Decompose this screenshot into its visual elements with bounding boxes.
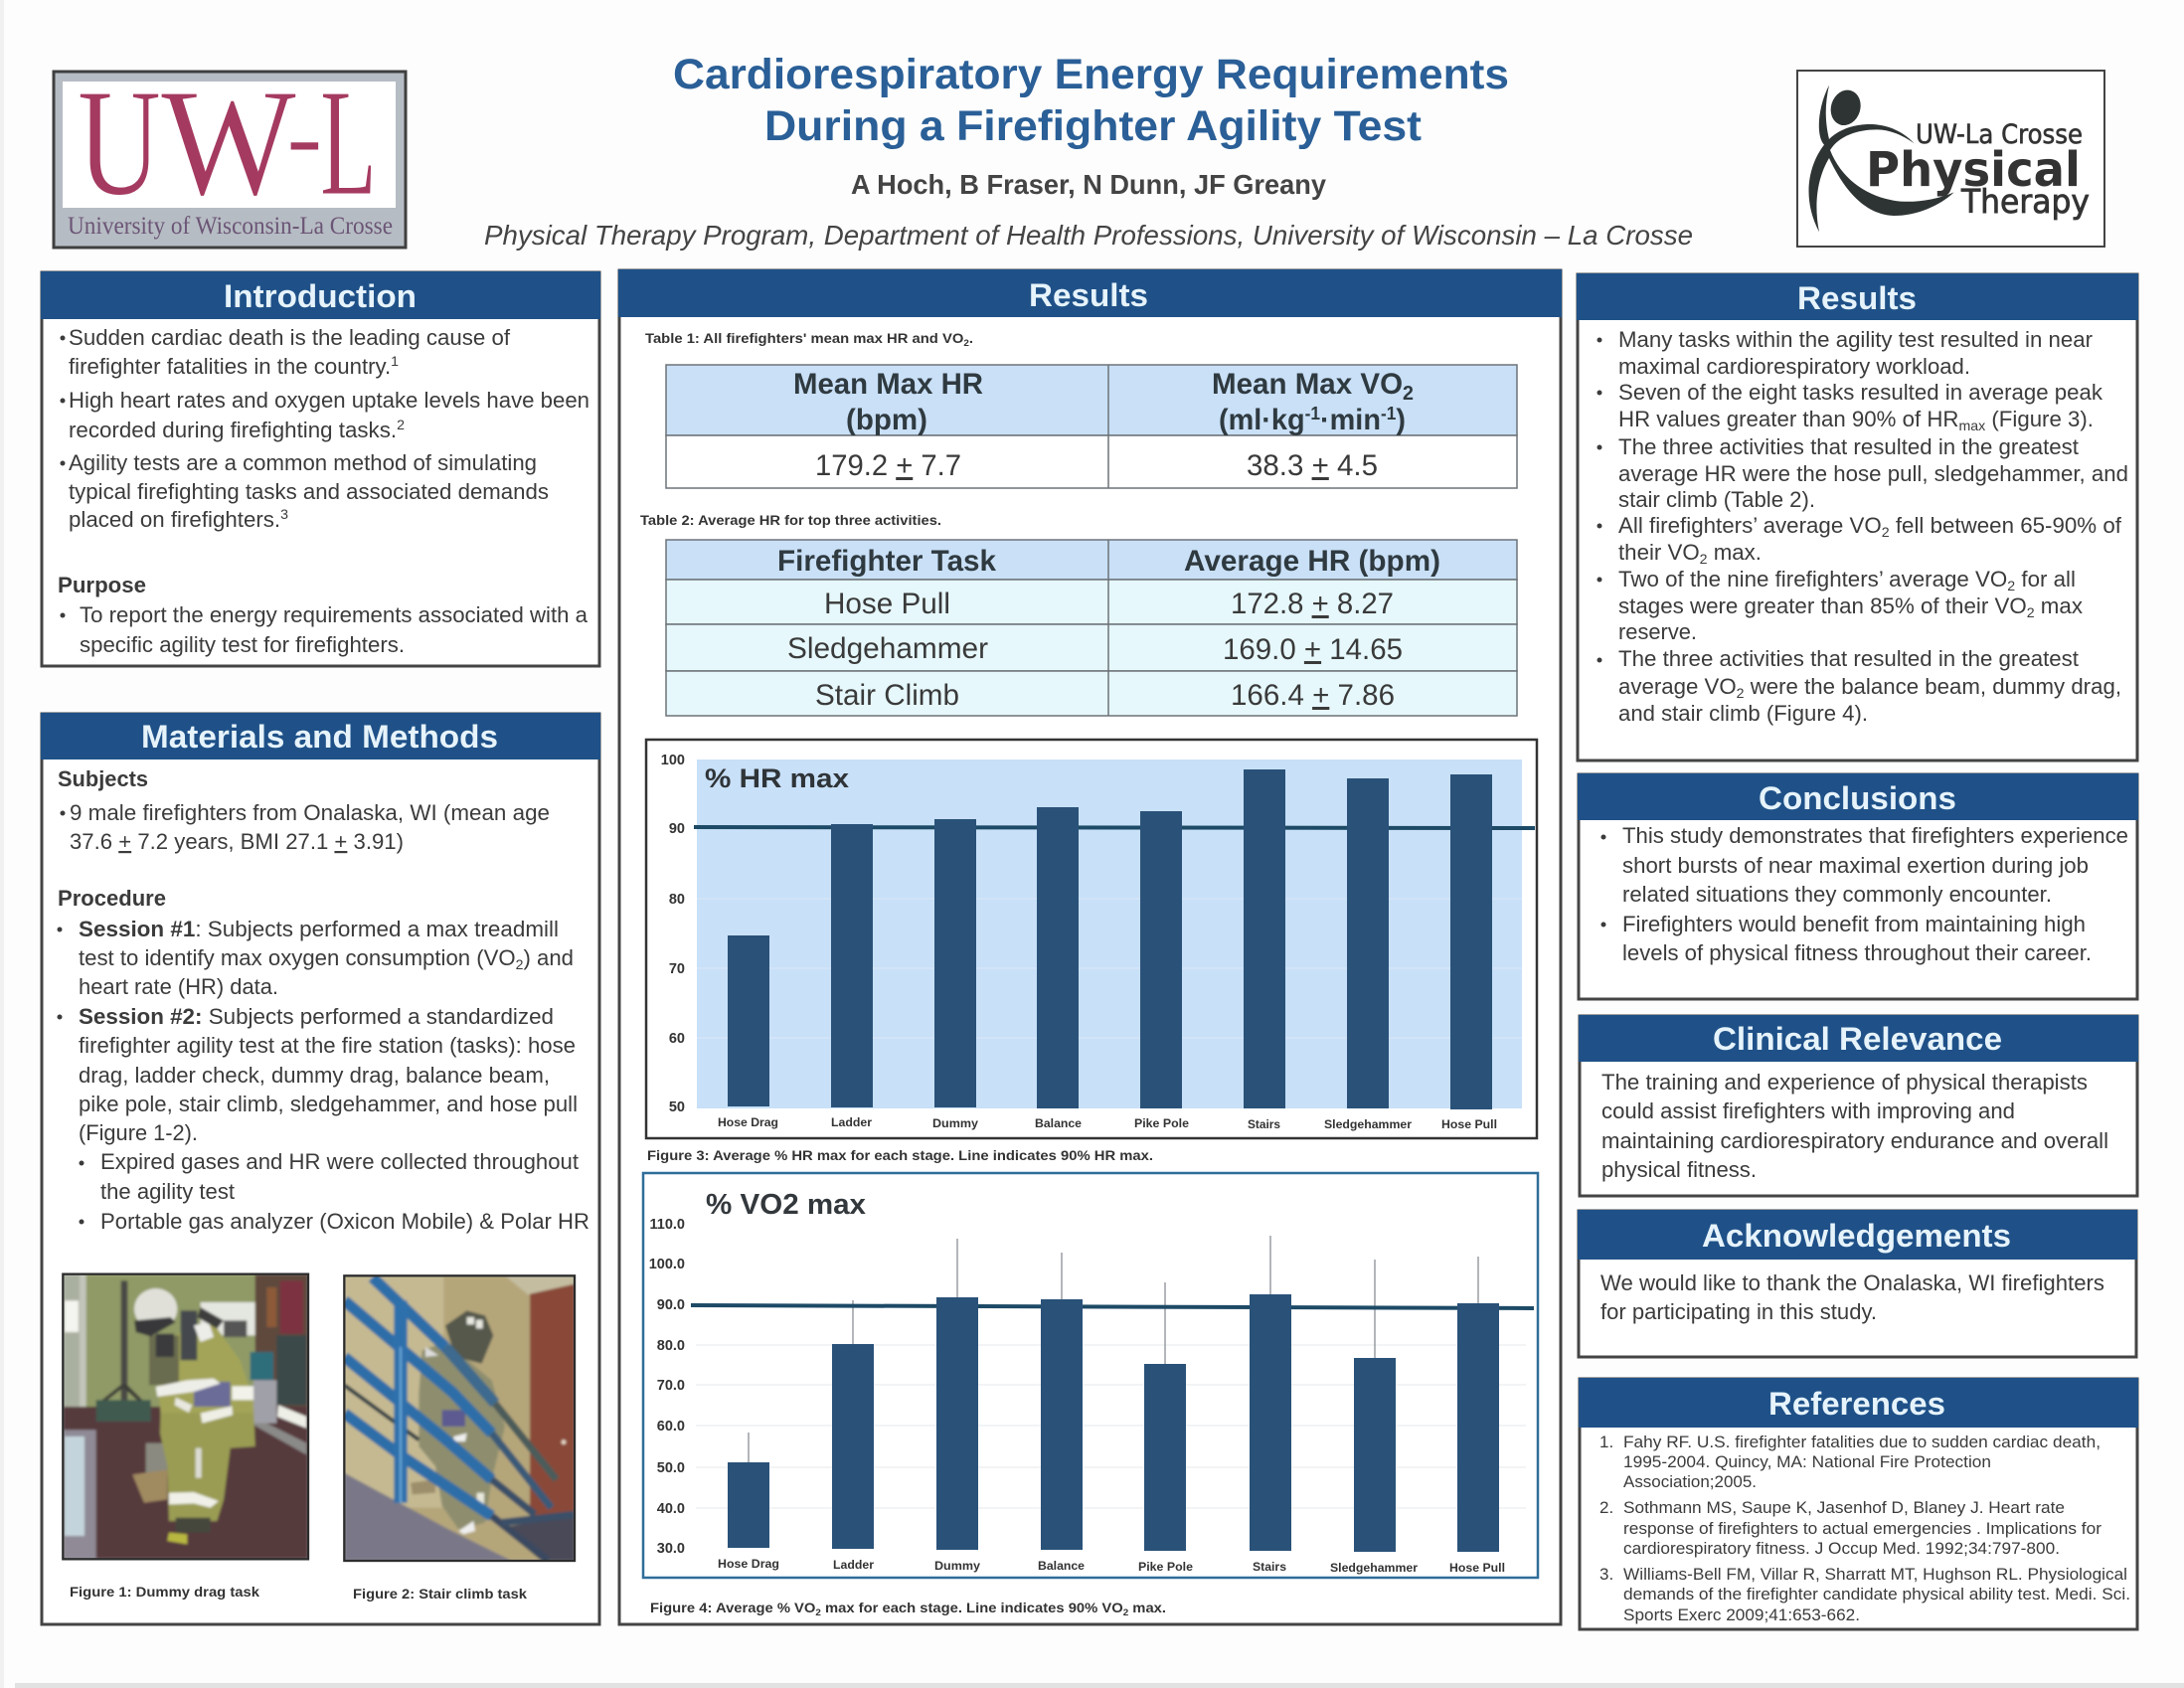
text block: introduction bullets: Agility tests are a common method of simulating [69,450,537,475]
text block: procedure: heart rate (HR) data. [79,974,278,999]
text block: conclusions bullets: levels of physical fitness throughout their career. [1622,940,2092,965]
photo: dummy drag task [63,1274,308,1559]
table 2: 169.0 + 14.65 [1223,633,1403,666]
text block: purpose: Purpose [58,573,146,597]
text block: conclusions bullets: Firefighters would benefit from maintaining high [1622,912,2086,936]
y axis labels [661,753,685,1115]
authors: A Hoch, B Fraser, N Dunn, JF Greany [851,169,1326,200]
table 1: Mean Max HR [793,368,983,401]
heading: results [1577,273,2138,320]
text block: procedure: the agility test [100,1179,235,1204]
title [673,51,1509,150]
text block: results bullets: fell between 65-90% of [1890,513,2122,538]
text block: results bullets: their VO [1618,540,1699,565]
figure 4 caption: 2 [1123,1607,1128,1617]
text block: purpose: To report the energy requirements associated with a [80,602,588,627]
bars [728,1294,1499,1552]
figure 4 caption: Figure 4: Average % VO [650,1601,801,1615]
text block: results bullets: 2 [1737,685,1745,701]
table 2 caption: Table 2: Average HR for top three activities. [640,513,941,528]
table 1 caption: Table 1: All firefighters' mean max HR and VO [645,331,935,346]
figure 4 caption: max. [1128,1601,1166,1615]
figure 4 caption: max for each stage. Line indicates 90% VO [821,1601,1123,1615]
heading: materials and methods [41,713,600,760]
text block: procedure: Expired gases and HR were collected throughout [100,1149,579,1174]
table 1: ·min [1320,404,1381,436]
photo: stair climb task [344,1275,575,1561]
text block: references list: response of firefighters to actual emergencies . Implications for [1623,1519,2101,1538]
text block: introduction bullets: 3 [280,506,288,522]
text block: results bullets: 2 [1700,551,1708,567]
text block: subjects: Subjects [58,766,148,791]
text block: references list: Sports Exerc 2009;41:653-662. [1623,1605,1860,1624]
table 2 [666,540,1517,716]
text block: procedure: Session #2: Subjects performed a standardized [79,1004,554,1029]
text block: introduction bullets: 2 [397,417,405,432]
heading: materials and methods: Materials and Methods [141,719,498,755]
text block: conclusions bullets: related situations they commonly encounter. [1622,882,2052,907]
text block: references list: demands of the firefighter candidate physical ability test. Medi. Sci. [1623,1585,2130,1604]
table 2: Firefighter Task [777,545,996,578]
x axis labels: Ladder [833,1558,874,1572]
text block: clinical relevance: The training and experience of physical therapists [1601,1070,2088,1095]
heading: results [618,269,1562,317]
panel: acknowledgements [1578,1210,2137,1357]
text block: results bullets: maximal cardiorespiratory workload. [1618,354,1970,379]
text block: results bullets: 2 [2007,578,2015,593]
text block: results bullets [1596,327,2128,726]
text block: results bullets: and stair climb (Figure 4). [1618,701,1868,726]
y axis labels: 70.0 [657,1378,685,1394]
text block: results bullets: max. [1708,540,1762,565]
text block: results bullets: The three activities that resulted in the greatest [1618,434,2079,459]
text block: procedure: Session #1: Subjects performed a max treadmill [79,917,559,941]
text block: references list: Sothmann MS, Saupe K, Jasenhof D, Blaney J. Heart rate [1623,1498,2065,1517]
heading: acknowledgements: Acknowledgements [1702,1218,2011,1254]
text block: conclusions bullets [1600,823,2128,965]
table 1: -1 [1305,404,1320,423]
text block: references list: 3. [1599,1565,1613,1584]
heading: conclusions: Conclusions [1759,780,1956,816]
table 1: -1 [1381,404,1396,423]
x axis labels: Dummy [934,1559,980,1573]
logo: UW-L: University of Wisconsin-La Crosse [68,213,393,240]
table 1 [666,365,1517,488]
heading: clinical relevance: Clinical Relevance [1713,1021,2002,1057]
figure 1 caption: Figure 1: Dummy drag task [70,1585,260,1600]
text block: results bullets: max [2035,593,2083,618]
text block: introduction bullets: Sudden cardiac death is the leading cause of [69,325,511,350]
x axis labels: Sledgehammer [1324,1117,1412,1131]
text block: procedure: (Figure 1-2). [79,1120,198,1145]
text block: subjects: 37.6 + 7.2 years, BMI 27.1 + 3.91) [70,829,404,854]
x axis labels [718,1115,1497,1131]
y axis labels: 70 [669,961,685,977]
y axis labels: 100 [661,753,685,768]
table 2: Sledgehammer [787,632,988,665]
table 1 caption: 2 [963,338,969,348]
table 1: (ml·kg [1219,404,1308,436]
table 1: Mean Max VO [1212,368,1406,401]
panel: materials and methods [41,713,600,1624]
panel: results right [1577,273,2138,760]
affiliation: Physical Therapy Program, Department of Health Professions, University of Wisconsin – La Crosse [484,220,1693,251]
text block: introduction bullets [60,325,589,532]
text block: results bullets: The three activities that resulted in the greatest [1618,646,2079,671]
x axis labels: Balance [1035,1116,1082,1130]
text block: results bullets: 2 [1882,524,1890,540]
text block: results bullets: for all [2015,567,2076,591]
y axis labels: 80 [669,892,685,908]
text block: clinical relevance: physical fitness. [1601,1157,1757,1182]
text block: results bullets: stages were greater than 85% of their VO [1618,593,2021,618]
heading: conclusions [1578,773,2138,820]
x axis labels: Pike Pole [1134,1116,1189,1130]
chart: figure 4 % VO2 max [643,1173,1538,1578]
text block: procedure [58,886,589,1234]
y axis labels: 110.0 [650,1217,685,1233]
logo: UW-La Crosse Physical Therapy: Therapy [1960,182,2090,221]
table 2: 172.8 + 8.27 [1231,588,1394,620]
text block: introduction bullets: recorded during firefighting tasks. [69,418,392,442]
text block: results bullets: reserve. [1618,619,1697,644]
y axis labels: 60 [669,1031,685,1047]
text block: references list: Fahy RF. U.S. firefighter fatalities due to sudden cardiac death, [1623,1433,2100,1451]
text block: results bullets: HR values greater than 90% of HR [1618,407,1955,431]
table 1: ) [1396,404,1406,436]
text block: results bullets: were the balance beam, dummy drag, [1745,674,2121,699]
logo: UW-L: L [320,59,377,228]
table 1 caption: . [969,331,973,346]
y axis labels: 60.0 [657,1419,685,1435]
figure 4 caption: 2 [815,1607,821,1617]
heading: introduction [41,271,600,319]
x axis labels: Hose Drag [718,1557,779,1571]
y axis labels: 100.0 [649,1257,685,1272]
text block: procedure: 2 [516,956,524,972]
x axis labels [718,1557,1505,1575]
logo: UW-La Crosse Physical Therapy: UW-La Crosse [1916,119,2083,150]
text block: references list: Williams-Bell FM, Villar R, Sharratt MT, Hughson RL. Physiological [1623,1565,2127,1584]
logo: UW-L: U [78,59,161,228]
chart: figure 3 % HR max [646,740,1537,1138]
y axis labels: 90 [669,821,685,837]
table 2: Stair Climb [815,679,959,712]
bars [728,769,1492,1109]
figure 2 caption: Figure 2: Stair climb task [353,1587,528,1602]
text block: procedure: ) and [523,945,574,970]
y axis labels: 50.0 [657,1460,685,1476]
heading: acknowledgements [1578,1210,2137,1260]
text block: procedure: test to identify max oxygen consumption (VO [79,945,513,970]
panel: results centre [618,269,1562,1624]
text block: procedure: drag, ladder check, dummy drag, balance beam, [79,1063,550,1088]
text block: results bullets: All firefighters’ average VO [1618,513,1878,538]
y axis labels: 80.0 [657,1338,685,1354]
x axis labels: Sledgehammer [1330,1561,1418,1575]
title: During a Firefighter Agility Test [764,102,1422,150]
text block: procedure: firefighter agility test at the fire station (tasks): hose [79,1033,576,1058]
text block: acknowledgements: We would like to thank the Onalaska, WI firefighters [1600,1270,2104,1295]
icon: figure swoosh [1809,85,1954,232]
text block: references list: 2. [1599,1498,1613,1517]
table 2: 166.4 + 7.86 [1231,679,1395,712]
logo: UW-La Crosse Physical Therapy [1797,71,2104,247]
panel: clinical relevance [1579,1015,2138,1196]
text block: subjects [58,766,550,854]
text block: clinical relevance: could assist firefighters with improving and [1601,1098,2015,1123]
text block: results bullets: 2 [2027,604,2035,620]
90 percent line [691,1305,1534,1308]
text block: procedure: pike pole, stair climb, sledgehammer, and hose pull [79,1092,578,1116]
x axis labels: Dummy [932,1116,978,1130]
text block: purpose [58,573,588,657]
text block: purpose: specific agility test for firefighters. [80,632,405,657]
text block: introduction bullets: typical firefighting tasks and associated demands [69,479,549,504]
table 1: 2 [1403,383,1414,405]
x axis labels: Stairs [1253,1560,1286,1574]
x axis labels: Hose Pull [1449,1561,1505,1575]
text block: clinical relevance [1601,1070,2108,1182]
logo: UW-L [54,59,406,248]
text block: conclusions bullets: This study demonstrates that firefighters experience [1622,823,2128,848]
panel: introduction [41,271,600,666]
text block: results bullets: average VO [1618,674,1735,699]
x axis labels: Stairs [1248,1117,1280,1131]
heading: clinical relevance [1579,1015,2138,1062]
y axis labels [649,1217,685,1557]
table 2: Hose Pull [824,588,950,620]
heading: references: References [1768,1386,1945,1422]
logo: UW-L: - [286,75,323,196]
text block: clinical relevance: maintaining cardiorespiratory endurance and overall [1601,1128,2108,1153]
text block: acknowledgements: for participating in this study. [1600,1299,1877,1324]
text block: results bullets: (Figure 3). [1985,407,2094,431]
table 1: (bpm) [846,404,927,436]
panel: references [1579,1378,2138,1629]
x axis labels: Balance [1038,1559,1085,1573]
logo: UW-La Crosse Physical Therapy: Physical [1866,142,2081,198]
title: Cardiorespiratory Energy Requirements [673,51,1509,98]
y axis labels: 50 [669,1099,685,1115]
panel: conclusions [1578,773,2138,999]
text block: introduction bullets: 1 [391,353,399,369]
y axis labels: 40.0 [657,1501,685,1517]
logo: UW-L: W [161,59,297,228]
text block: introduction bullets: firefighter fatalities in the country. [69,354,388,379]
text block: results bullets: stair climb (Table 2). [1618,487,1815,512]
x axis labels: Hose Pull [1441,1117,1497,1131]
table 1: 38.3 + 4.5 [1247,449,1378,482]
heading: references [1579,1378,2138,1428]
text block: acknowledgements [1600,1270,2104,1324]
text block: results bullets: Many tasks within the agility test resulted in near [1618,327,2093,352]
x axis labels: Pike Pole [1138,1560,1193,1574]
text block: references list: cardiorespiratory fitness. J Occup Med. 1992;34:797-800. [1623,1539,2060,1558]
90 percent line [694,827,1535,828]
text block: references list: 1. [1599,1433,1613,1451]
text block: introduction bullets: placed on firefighters. [69,507,277,532]
x axis labels: Ladder [831,1115,872,1129]
table 2: Average HR (bpm) [1184,545,1440,578]
heading: results: Results [1029,277,1148,313]
chart title: % HR max [705,763,849,793]
text block: conclusions bullets: short bursts of near maximal exertion during job [1622,853,2089,878]
heading: results: Results [1797,280,1917,316]
text block: results bullets: Seven of the eight tasks resulted in average peak [1618,380,2103,405]
text block: results bullets: average HR were the hose pull, sledgehammer, and [1618,461,2128,486]
text block: procedure: Portable gas analyzer (Oxicon Mobile) & Polar HR [100,1209,589,1234]
figure 3 caption: Figure 3: Average % HR max for each stage. Line indicates 90% HR max. [647,1148,1153,1163]
heading: introduction: Introduction [224,278,417,314]
text block: subjects: 9 male firefighters from Onalaska, WI (mean age [70,800,550,825]
y axis labels: 30.0 [657,1541,685,1557]
text block: results bullets: Two of the nine firefighters’ average VO [1618,567,2002,591]
table 1: 179.2 + 7.7 [815,449,961,482]
text block: references list: 1995-2004. Quincy, MA: National Fire Protection [1623,1452,1991,1471]
text block: references list: Association;2005. [1623,1472,1757,1491]
text block: introduction bullets: High heart rates and oxygen uptake levels have been [69,388,589,413]
chart title: % VO2 max [706,1189,866,1221]
text block: procedure: Procedure [58,886,166,911]
x axis labels: Hose Drag [718,1115,778,1129]
error bars [749,1236,1478,1462]
y axis labels: 90.0 [657,1297,685,1313]
text block: results bullets: max [1958,418,1985,433]
text block: references list [1599,1433,2130,1624]
